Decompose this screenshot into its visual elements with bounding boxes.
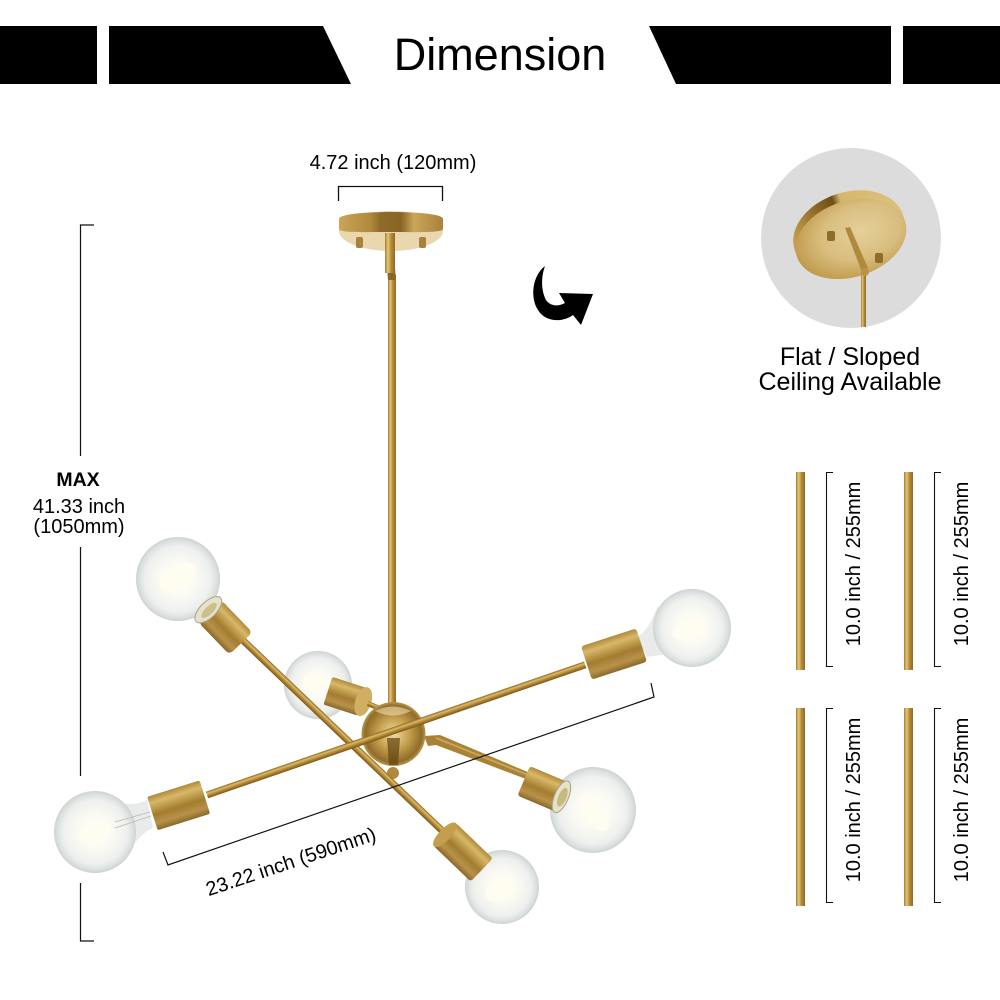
extension rod bottom left <box>796 708 865 906</box>
ceiling caption <box>758 343 942 396</box>
height label: 41.33 inch <box>33 496 125 518</box>
upper left bulb <box>136 537 220 621</box>
width dimension label: 23.22 inch (590mm) <box>203 824 379 901</box>
ceiling detail circle <box>761 148 941 328</box>
extension rod bottom left: 10.0 inch / 255mm <box>843 718 865 882</box>
lower bulb <box>465 850 539 924</box>
ceiling caption: Ceiling Available <box>758 368 942 396</box>
back socket upper left <box>323 676 376 718</box>
left socket <box>147 780 210 830</box>
height dimension line <box>80 225 94 941</box>
upper left socket <box>191 592 253 655</box>
extension rod bottom right <box>904 708 973 906</box>
chandelier <box>54 211 731 924</box>
extension rod top left <box>796 472 865 670</box>
extension rod top left: 10.0 inch / 255mm <box>843 482 865 646</box>
lower right bulb <box>550 767 636 853</box>
stem <box>845 227 869 327</box>
left bulb <box>54 791 153 873</box>
canopy width bracket <box>338 186 442 201</box>
extension rod bottom right: 10.0 inch / 255mm <box>951 718 973 882</box>
right bulb <box>637 589 731 667</box>
canopy width label: 4.72 inch (120mm) <box>310 152 476 174</box>
lower socket <box>430 819 493 882</box>
height label <box>33 469 125 538</box>
lower nub <box>387 767 399 779</box>
height label: (1050mm) <box>33 516 125 538</box>
ceiling caption: Flat / Sloped <box>780 343 920 371</box>
back bulb upper left <box>284 651 352 719</box>
width dimension bracket <box>163 683 654 865</box>
lower right socket <box>517 765 574 815</box>
back arm <box>367 701 530 779</box>
extension rod top right: 10.0 inch / 255mm <box>951 482 973 646</box>
right socket <box>581 628 647 680</box>
canopy <box>339 211 443 273</box>
height label: MAX <box>56 469 100 491</box>
diagonal arm front <box>238 635 452 840</box>
screws <box>827 231 883 263</box>
long arm <box>206 661 586 798</box>
center ball <box>362 702 426 766</box>
header banner <box>0 26 1000 84</box>
canopy underside <box>782 177 917 293</box>
curved arrow icon <box>533 266 593 325</box>
title: Dimension <box>394 29 606 80</box>
vertical stem <box>385 232 396 710</box>
extension rod top right <box>904 472 973 670</box>
